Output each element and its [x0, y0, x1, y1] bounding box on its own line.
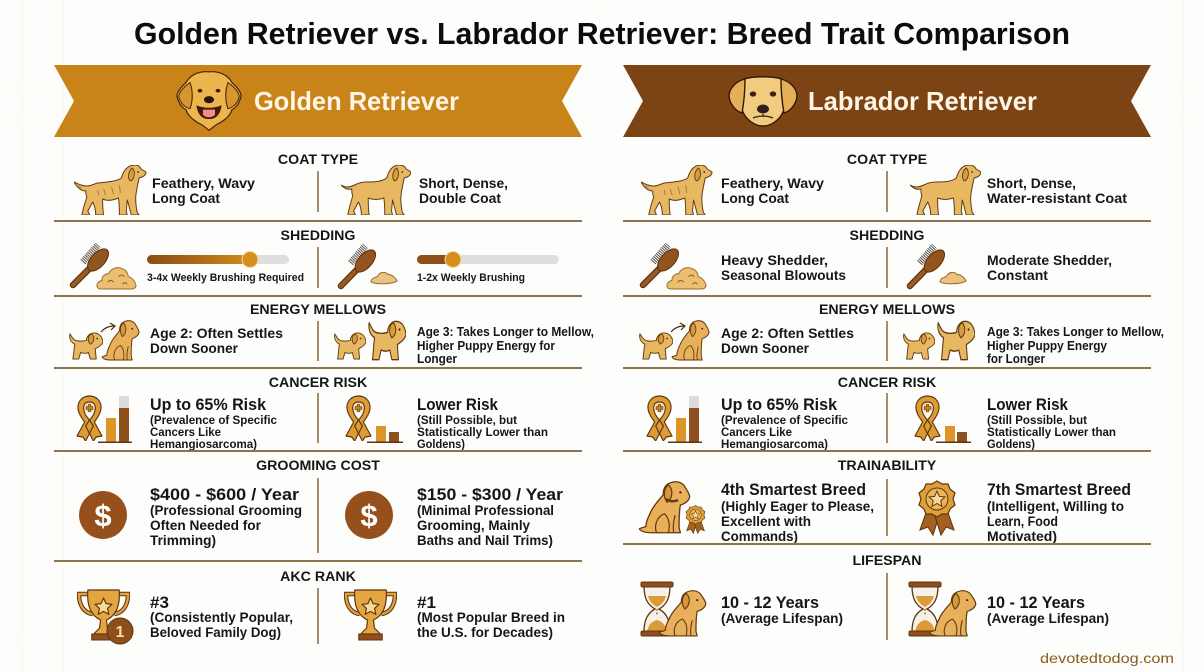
text: long coat — [152, 176, 255, 207]
text: high risk — [150, 396, 277, 451]
text: lifespan: (Average Lifespan) — [987, 610, 1109, 626]
text: 4th smartest: Excellent with — [721, 513, 811, 529]
icon: brush with light fur — [910, 246, 966, 286]
text: high risk: Cancers Like — [150, 425, 221, 439]
icon: puppy to adult sitting — [640, 321, 709, 360]
text: age 2: Down Sooner — [721, 341, 809, 357]
text: rank 1 — [417, 593, 565, 640]
icon: trophy with number one badge — [79, 590, 133, 644]
text: lifespan — [721, 593, 843, 626]
heading: lifespan: LIFESPAN — [852, 553, 922, 569]
text: lower risk: (Still Possible, but — [987, 413, 1087, 427]
text: age 3 — [417, 324, 594, 366]
text: long coat: Long Coat — [152, 191, 220, 207]
text: age 3: Age 3: Takes Longer to Mellow, — [417, 324, 594, 339]
icon: short coat dog — [341, 165, 411, 215]
heading: cancer risk: CANCER RISK — [838, 375, 937, 391]
text: heavy shedder: Seasonal Blowouts — [721, 268, 846, 284]
text: lifespan: 10 - 12 Years — [987, 593, 1085, 612]
text: high risk: Hemangiosarcoma) — [721, 437, 828, 451]
text: lower risk: Statistically Lower than — [417, 425, 548, 439]
text: rank 3: (Consistently Popular, — [150, 609, 293, 625]
text: high risk: Up to 65% Risk — [721, 396, 838, 414]
icon: ribbon and low bars — [346, 396, 403, 443]
text: age 2 — [150, 326, 283, 357]
text: long coat: Feathery, Wavy — [721, 176, 824, 192]
icon: puppy and large dog — [335, 321, 406, 360]
row: akc rank — [79, 569, 565, 644]
text: short coat: Water-resistant Coat — [987, 191, 1127, 207]
row: coat type — [641, 152, 1127, 215]
icon: rosette — [919, 481, 955, 535]
text: lower risk: (Still Possible, but — [417, 413, 517, 427]
footer: site credit: devotedtodog.com — [1040, 651, 1174, 666]
icon: short coat dog — [910, 165, 981, 215]
text: lower risk: Lower Risk — [417, 396, 499, 414]
icon: dollar coin — [345, 491, 393, 539]
text: high grooming cost: $400 - $600 / Year — [150, 485, 299, 504]
text: high grooming cost — [150, 485, 302, 548]
text: high risk: Up to 65% Risk — [150, 396, 267, 414]
heading: energy mellows: ENERGY MELLOWS — [819, 302, 955, 318]
row: cancer risk — [77, 375, 548, 451]
heading: cancer risk: CANCER RISK — [269, 375, 368, 391]
text: long coat — [721, 176, 824, 207]
text: rank 1: the U.S. for Decades) — [417, 624, 553, 640]
text: age 2 — [721, 326, 854, 357]
icon: brush with heavy fur — [643, 245, 706, 289]
text: lower grooming cost — [417, 485, 563, 548]
text: moderate shedder: Constant — [987, 268, 1048, 284]
text: short coat: Short, Dense, — [419, 176, 508, 192]
text: age 3: Higher Puppy Energy for — [417, 338, 555, 353]
icon: puppy to adult sitting — [70, 321, 139, 360]
row: energy mellows — [640, 302, 1164, 366]
text: long coat: Feathery, Wavy — [152, 176, 255, 192]
banner: labrador retriever — [623, 65, 1151, 137]
text: 4th smartest: 4th Smartest Breed — [721, 480, 866, 499]
text: 7th smartest: Learn, Food — [987, 513, 1058, 529]
row: lifespan — [641, 553, 1109, 640]
slider: heavy brushing — [147, 252, 289, 268]
text: lower risk: Statistically Lower than — [987, 425, 1116, 439]
row: trainability — [639, 458, 1131, 544]
heading: trainability: TRAINABILITY — [838, 458, 937, 474]
icon: dollar coin: $ — [360, 498, 378, 533]
text: short coat — [987, 176, 1127, 207]
text: lower risk: Goldens) — [987, 437, 1035, 451]
icon: golden retriever head — [177, 72, 241, 130]
heading: shedding: SHEDDING — [850, 228, 924, 244]
banner: golden retriever — [54, 65, 582, 137]
text: 7th smartest: (Intelligent, Willing to — [987, 498, 1124, 514]
icon: brush with heavy fur — [73, 245, 136, 289]
icon: long coat dog — [74, 165, 146, 215]
text: age 3: Longer — [417, 351, 457, 366]
icon: puppy and large dog — [904, 321, 975, 360]
icon: hourglass and dog — [909, 582, 976, 636]
text: high risk: (Prevalence of Specific — [150, 413, 277, 427]
text: age 3 — [987, 324, 1164, 366]
text: lifespan — [987, 593, 1109, 626]
text: lifespan: (Average Lifespan) — [721, 610, 843, 626]
text: lower grooming cost: Baths and Nail Trims) — [417, 532, 553, 548]
text: short coat: Double Coat — [419, 191, 501, 207]
text: high grooming cost: Trimming) — [150, 532, 216, 548]
text: rank 3 — [150, 593, 293, 640]
text: lifespan: 10 - 12 Years — [721, 593, 819, 612]
text: high grooming cost: Often Needed for — [150, 517, 262, 533]
icon: sitting dog with rosette — [639, 482, 705, 533]
heading: energy mellows: ENERGY MELLOWS — [250, 302, 386, 318]
text: high risk — [721, 396, 848, 451]
panel: golden retriever — [54, 65, 594, 644]
heading: akc rank: AKC RANK — [280, 569, 357, 585]
text: high grooming cost: (Professional Grooming — [150, 502, 302, 518]
icon: trophy with number one badge: 1 — [116, 624, 125, 641]
text: age 3: for Longer — [987, 351, 1045, 366]
icon: dollar coin — [79, 491, 127, 539]
text: age 3: Age 3: Takes Longer to Mellow, — [987, 324, 1164, 339]
text: light brushing: 1-2x Weekly Brushing — [417, 272, 525, 284]
text: 4th smartest: (Highly Eager to Please, — [721, 498, 874, 514]
icon: ribbon and low bars — [915, 396, 971, 443]
icon: brush with light fur — [341, 246, 397, 286]
text: heavy brushing: 3-4x Weekly Brushing Required — [147, 272, 304, 284]
row: shedding — [73, 228, 559, 289]
text: age 3: Higher Puppy Energy — [987, 338, 1108, 353]
title: Golden Retriever vs. Labrador Retriever: Breed Trait Comparison — [134, 16, 1070, 51]
icon: ribbon and high bars — [647, 396, 702, 443]
text: lower grooming cost: Grooming, Mainly — [417, 517, 530, 533]
text: rank 1: (Most Popular Breed in — [417, 609, 565, 625]
text: short coat — [419, 176, 508, 207]
text: 4th smartest: Commands) — [721, 528, 798, 544]
text: lower risk: Lower Risk — [987, 396, 1069, 414]
text: long coat: Long Coat — [721, 191, 789, 207]
icon: ribbon and high bars — [77, 396, 132, 443]
banner label: Golden Retriever — [254, 86, 459, 116]
icon: dollar coin: $ — [94, 498, 112, 533]
text: lower grooming cost: (Minimal Professional — [417, 502, 554, 518]
text: short coat: Short, Dense, — [987, 176, 1076, 192]
heading: coat type: COAT TYPE — [278, 152, 358, 168]
icon: labrador head — [729, 77, 797, 126]
icon: long coat dog — [641, 165, 712, 215]
text: age 2: Age 2: Often Settles — [150, 326, 283, 342]
text: age 2: Age 2: Often Settles — [721, 326, 854, 342]
heading: coat type: COAT TYPE — [847, 152, 927, 168]
row: cancer risk — [647, 375, 1116, 451]
text: moderate shedder: Moderate Shedder, — [987, 253, 1112, 269]
banner label: Labrador Retriever — [808, 86, 1037, 116]
row: energy mellows — [70, 302, 594, 366]
text: age 2: Down Sooner — [150, 341, 238, 357]
row: coat type — [74, 152, 508, 215]
text: heavy shedder: Heavy Shedder, — [721, 253, 828, 269]
heading: grooming cost: GROOMING COST — [256, 458, 380, 474]
text: 7th smartest — [987, 480, 1131, 544]
row: shedding — [643, 228, 1112, 289]
text: moderate shedder — [987, 253, 1112, 284]
text: 7th smartest: Motivated) — [987, 528, 1057, 544]
text: rank 1: #1 — [417, 593, 436, 612]
text: high risk: Hemangiosarcoma) — [150, 437, 257, 451]
text: high risk: (Prevalence of Specific — [721, 413, 848, 427]
icon: trophy — [346, 590, 395, 640]
text: 4th smartest — [721, 480, 874, 544]
row: grooming cost — [79, 458, 563, 553]
text: rank 3: #3 — [150, 593, 169, 612]
text: heavy shedder — [721, 253, 846, 284]
text: 7th smartest: 7th Smartest Breed — [987, 480, 1131, 499]
text: lower grooming cost: $150 - $300 / Year — [417, 485, 563, 504]
slider: light brushing — [417, 252, 559, 268]
text: rank 3: Beloved Family Dog) — [150, 624, 281, 640]
text: lower risk — [987, 396, 1116, 451]
heading: shedding: SHEDDING — [281, 228, 355, 244]
text: lower risk — [417, 396, 548, 451]
icon: hourglass and dog — [641, 582, 706, 636]
panel: labrador retriever — [623, 65, 1164, 640]
text: high risk: Cancers Like — [721, 425, 792, 439]
text: lower risk: Goldens) — [417, 437, 465, 451]
